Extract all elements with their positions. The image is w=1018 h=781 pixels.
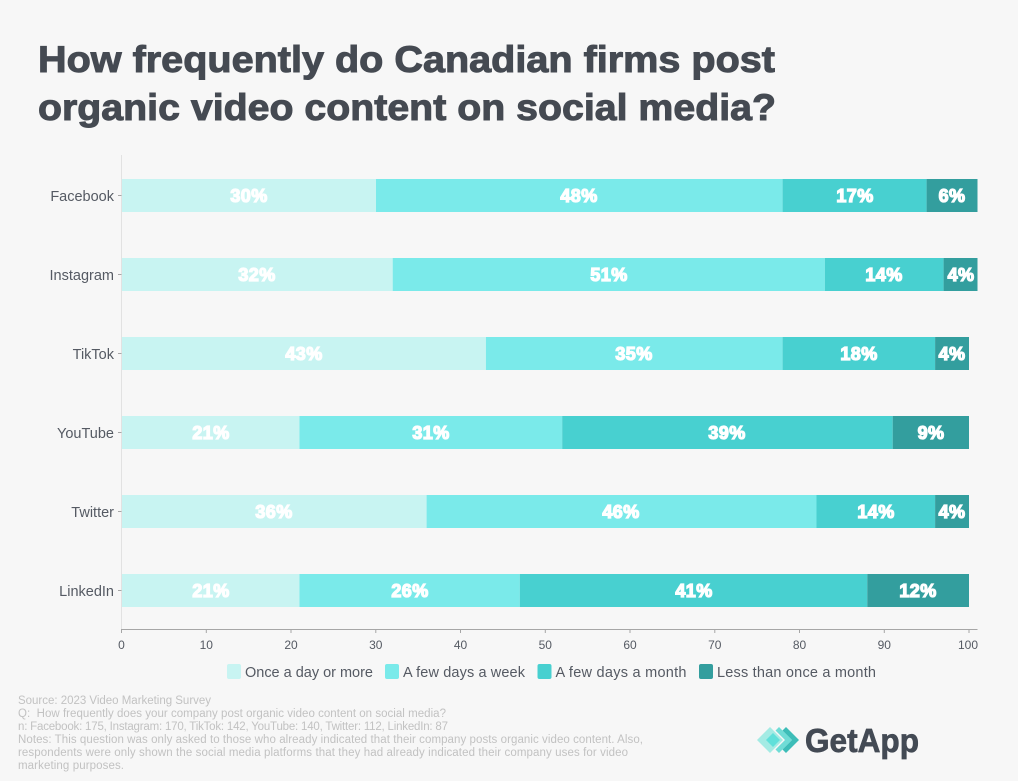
row: Facebook: Facebook (50, 189, 115, 205)
legend: Once a day or more (245, 665, 373, 681)
x axis: 40 (454, 638, 467, 652)
row: Instagram: 51% (590, 265, 628, 285)
row: Facebook: 6% (939, 186, 965, 206)
footnotes: Source: 2023 Video Marketing Survey (18, 695, 211, 707)
title (38, 39, 776, 128)
x axis: 70 (708, 638, 722, 652)
row: Twitter (71, 495, 969, 528)
icon: GetApp diamonds (757, 727, 799, 753)
row: LinkedIn: 21% (192, 581, 230, 601)
row: LinkedIn: 41% (675, 581, 713, 601)
x axis: 100 (958, 638, 978, 652)
row: LinkedIn: 26% (391, 581, 429, 601)
row: YouTube (57, 416, 969, 449)
row: YouTube: 9% (918, 423, 944, 443)
row: TikTok: 35% (615, 344, 653, 364)
row: TikTok: 18% (840, 344, 878, 364)
logo: GetApp: GetApp (805, 722, 919, 759)
x axis (118, 629, 978, 652)
legend: A few days a week (403, 665, 526, 681)
logo: GetApp (757, 722, 919, 759)
row: LinkedIn: LinkedIn (59, 584, 114, 600)
footnotes: Q: How frequently does your company post organic video content on social media? (18, 708, 446, 720)
row: TikTok: TikTok (73, 347, 115, 363)
x axis: 90 (878, 638, 891, 652)
legend (227, 664, 876, 681)
row: Instagram: 4% (948, 265, 974, 285)
legend: A few days a month (556, 665, 686, 681)
legend: Less than once a month (717, 665, 876, 681)
x axis: 10 (200, 638, 213, 652)
row: Twitter: 46% (602, 502, 640, 522)
row: LinkedIn (59, 574, 969, 607)
footnotes: n: Facebook: 175, Instagram: 170, TikTok: 142, YouTube: 140, Twitter: 112, LinkedIn: 87 (18, 721, 448, 733)
footnotes: Notes: This question was only asked to those who already indicated that their company posts organic video content. Also, (18, 734, 643, 746)
footnotes: marketing purposes. (18, 760, 124, 772)
title: How frequently do Canadian firms post (38, 39, 775, 80)
row: Instagram: 14% (865, 265, 903, 285)
x axis: 60 (623, 638, 637, 652)
row: Twitter: 36% (255, 502, 293, 522)
row: YouTube: 31% (412, 423, 450, 443)
row: Twitter: Twitter (71, 505, 114, 521)
x axis: 30 (369, 638, 383, 652)
row: TikTok: 43% (285, 344, 323, 364)
x axis: 0 (118, 638, 125, 652)
row: LinkedIn: 12% (899, 581, 937, 601)
x axis: 80 (793, 638, 806, 652)
row: Twitter: 14% (857, 502, 895, 522)
row: YouTube: YouTube (57, 426, 114, 442)
row: Twitter: 4% (939, 502, 965, 522)
row: Instagram (50, 258, 978, 291)
row: YouTube: 21% (192, 423, 230, 443)
row: Facebook: 30% (230, 186, 268, 206)
row: TikTok (73, 337, 969, 370)
footnotes: respondents were only shown the social media platforms that they had already indicated their company uses for video (18, 747, 628, 759)
x axis: 20 (284, 638, 298, 652)
row: Instagram: Instagram (50, 268, 114, 284)
row: Instagram: 32% (238, 265, 276, 285)
row: Facebook (50, 179, 978, 212)
row: Facebook: 48% (560, 186, 598, 206)
x axis: 50 (539, 638, 552, 652)
chart: stacked bar chart (50, 155, 978, 652)
footnotes (18, 695, 643, 772)
row: TikTok: 4% (939, 344, 965, 364)
row: YouTube: 39% (708, 423, 746, 443)
row: Facebook: 17% (836, 186, 874, 206)
title: organic video content on social media? (38, 87, 776, 128)
